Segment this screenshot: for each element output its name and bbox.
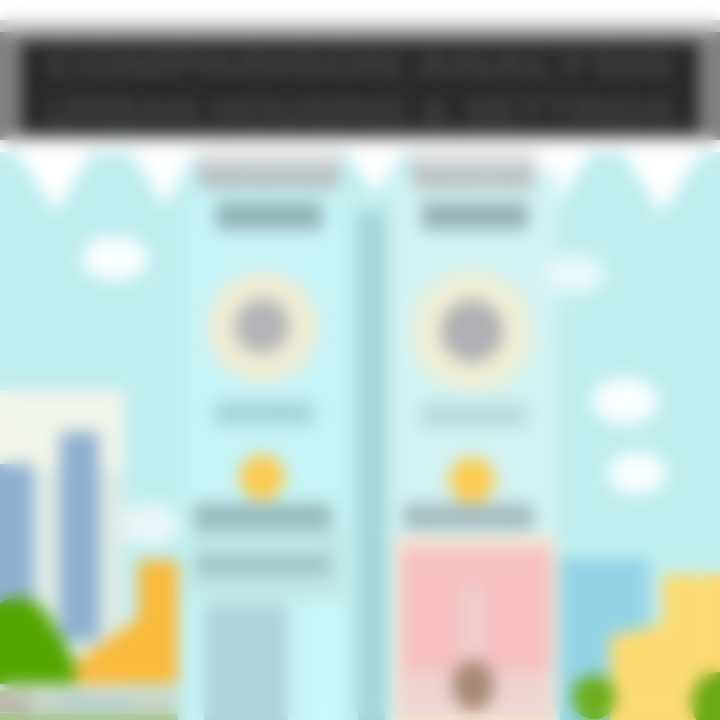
left circle caption [214,400,314,426]
right subheading: Section title [408,507,530,526]
window right [60,432,99,640]
right heading line two [422,202,528,230]
building door [452,660,494,710]
left heading line two [216,202,322,230]
heading backing right [410,150,538,170]
building base [394,536,556,720]
left heading text: Option one [201,167,337,187]
left description line [196,554,330,576]
title text [45,45,675,130]
left subheading: Section title [198,507,328,526]
right subheading [404,503,534,530]
left subheading [194,503,332,530]
left circle caption: Short caption [225,405,303,419]
right circle caption [420,402,528,428]
green tree left [0,597,76,684]
title text: URBAN HOUSING & SETTINGS [45,89,675,130]
banner panel [22,42,698,132]
yellow building [610,574,720,720]
building centre strip [462,585,484,665]
right circle caption: Short caption [435,407,513,421]
clouds [82,236,666,547]
page header white [0,0,720,152]
sky scallops [16,150,702,214]
lower tower shade [0,470,122,690]
ground strip left [0,690,178,720]
tower body [0,390,124,692]
title banner [0,20,720,140]
right circle icon [412,271,532,391]
banner soft top [0,20,720,34]
right heading [412,164,534,230]
center divider [358,212,385,720]
green tree right large [692,672,720,720]
right heading line one [412,164,534,190]
left heading [198,164,340,230]
left yellow badge [239,454,285,500]
banner backing [0,32,720,140]
left section band [190,530,345,600]
building facade [402,548,550,712]
panel: left column [186,172,344,720]
heading backing left [196,150,342,170]
right heading text: Option two [417,167,529,187]
sky blue building [560,558,648,720]
left circle icon [207,271,319,383]
window left [0,464,33,636]
panel: right column [392,172,558,720]
left skyscraper [0,390,124,692]
orange building [76,560,178,684]
pink building [394,536,556,720]
building lower band [404,672,550,714]
left heading line one [198,164,340,190]
right yellow badge [449,457,495,503]
title text: COMPARISON ANALYSIS [45,45,675,86]
left text block [204,600,342,720]
left description line: Supporting note [199,558,327,573]
green tree right small [572,675,616,719]
